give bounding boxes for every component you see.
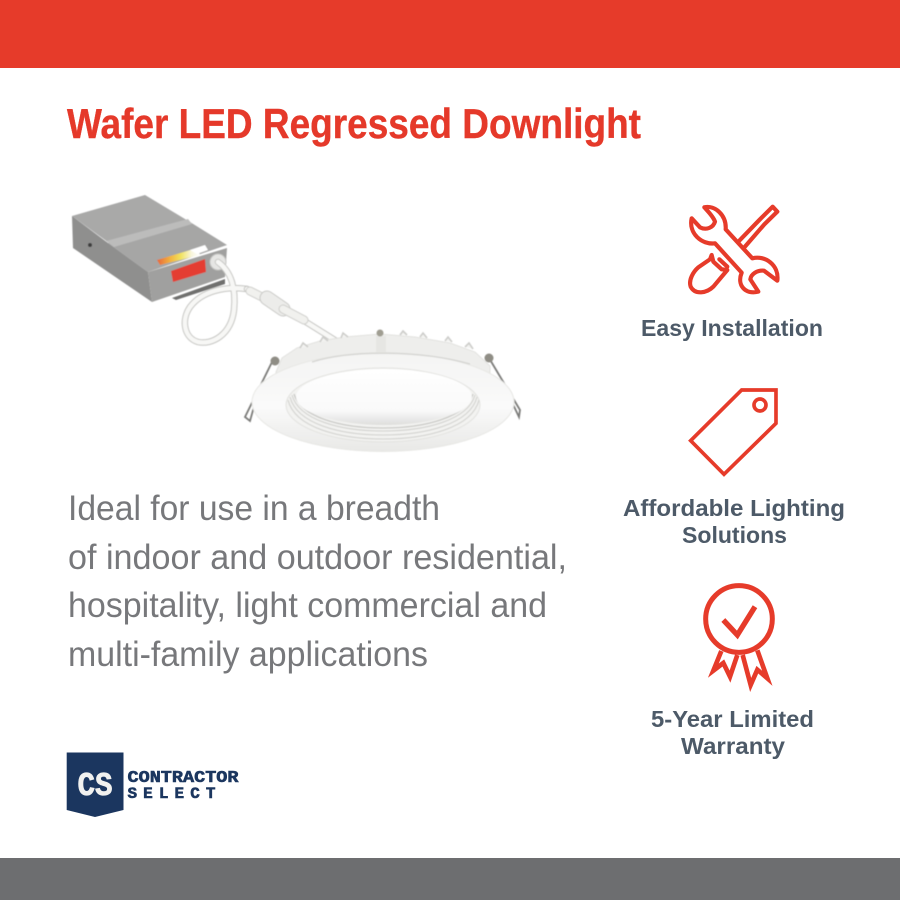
toothed rear housing (276, 331, 490, 385)
description text: multi-family applications (68, 635, 428, 674)
spring clips (245, 358, 520, 421)
logo wordmark (128, 768, 239, 803)
label: Affordable Lighting Solutions (623, 495, 845, 548)
label: Affordable Lighting Solutions: Solutions (682, 522, 787, 548)
trim flange (252, 352, 514, 452)
label: 5-Year Limited Warranty: 5-Year Limited (651, 706, 814, 732)
top red banner (0, 0, 900, 68)
bottom gray bar (0, 858, 900, 900)
label: Affordable Lighting Solutions: Affordable Lighting (623, 495, 845, 521)
red selector switch (171, 259, 206, 282)
description text: hospitality, light commercial and (68, 586, 547, 625)
label: 5-Year Limited Warranty (651, 706, 814, 759)
product photo: LED downlight with junction box (72, 195, 520, 452)
logo: Contractor Select (67, 752, 239, 817)
icon: award ribbon with check mark (706, 586, 772, 685)
logo wordmark: CONTRACTOR (128, 768, 239, 787)
clip screws (270, 330, 494, 366)
logo monogram: CS (78, 768, 112, 805)
stepped baffle (286, 368, 480, 442)
title: Wafer LED Regressed Downlight (67, 100, 641, 147)
description text (68, 489, 567, 674)
description text: Ideal for use in a breadth (68, 489, 440, 528)
logo wordmark: SELECT (128, 785, 216, 803)
logo shield (67, 752, 124, 817)
cable plug (210, 254, 226, 270)
icon: price tag (691, 390, 776, 474)
label: 5-Year Limited Warranty: Warranty (681, 733, 785, 759)
power cable (185, 262, 338, 343)
junction box (72, 195, 227, 302)
label: Easy Installation: Easy Installation (641, 315, 823, 341)
diffuser lens (296, 369, 472, 425)
icon: wrench and screwdriver (690, 207, 778, 292)
description text: of indoor and outdoor residential, (68, 538, 567, 577)
